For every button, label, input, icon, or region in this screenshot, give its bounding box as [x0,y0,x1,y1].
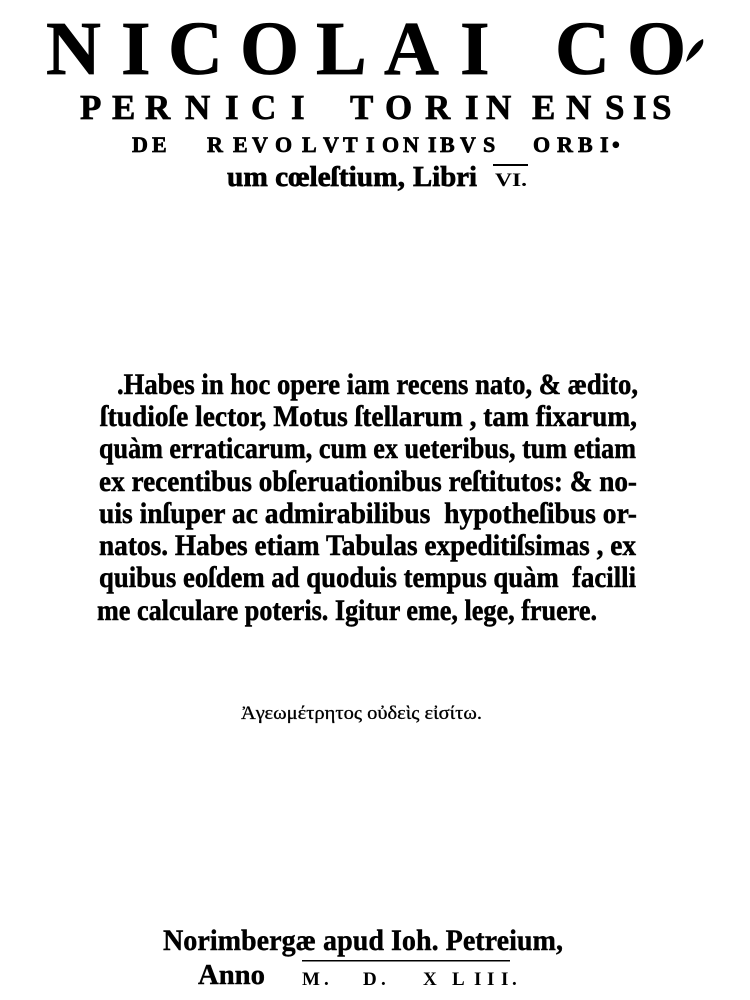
rule under imprint [302,960,510,962]
title line 1: NICOLAI CO [46,7,686,91]
date numeral M: M. [302,969,329,990]
paragraph line 6: natos. Habes etiam Tabulas expeditiſsimas , ex [99,529,636,562]
date numeral D: D. [363,969,386,990]
paragraph line 3: quàm erraticarum, cum ex ueteribus, tum etiam [99,432,636,465]
imprint [163,924,563,991]
greek motto: Ἀγεωμέτρητος οὐδεὶς εἰσίτω. [241,703,482,724]
imprint line 1: Norimbergæ apud Ioh. Petreium, [163,924,563,957]
paragraph line 8: me calculare poteris. Igitur eme, lege, fruere. [97,594,597,627]
text block: main paragraph [97,368,638,627]
title line 2: PERNICITORINENSIS [80,88,671,127]
title line 3: DEREVOLVTIONIBVSORBI• [132,132,620,157]
paragraph line 7: quibus eoſdem ad quoduis tempus quàm facilli [99,561,636,594]
title line 4: um cœleſtium, [227,161,405,193]
paragraph line 5: uis inſuper ac admirabilibus hypotheſibus or- [99,497,637,530]
paragraph line 1: .Habes in hoc opere iam recens nato, & ædito, [117,368,638,401]
title flourish [686,39,703,62]
imprint line 2: date: Anno [198,959,265,991]
title line 4: VI: VI. [495,170,527,191]
paragraph line 2: ſtudioſe lector, Motus ſtellarum , tam fixarum, [100,400,637,433]
overline on VI [493,164,528,166]
heading: book title [46,7,703,193]
paragraph line 4: ex recentibus obſeruationibus reſtitutos: & no- [99,465,637,498]
date numeral XLIII: XLIII. [423,969,517,990]
title line 4: Libri: Libri [413,161,477,193]
